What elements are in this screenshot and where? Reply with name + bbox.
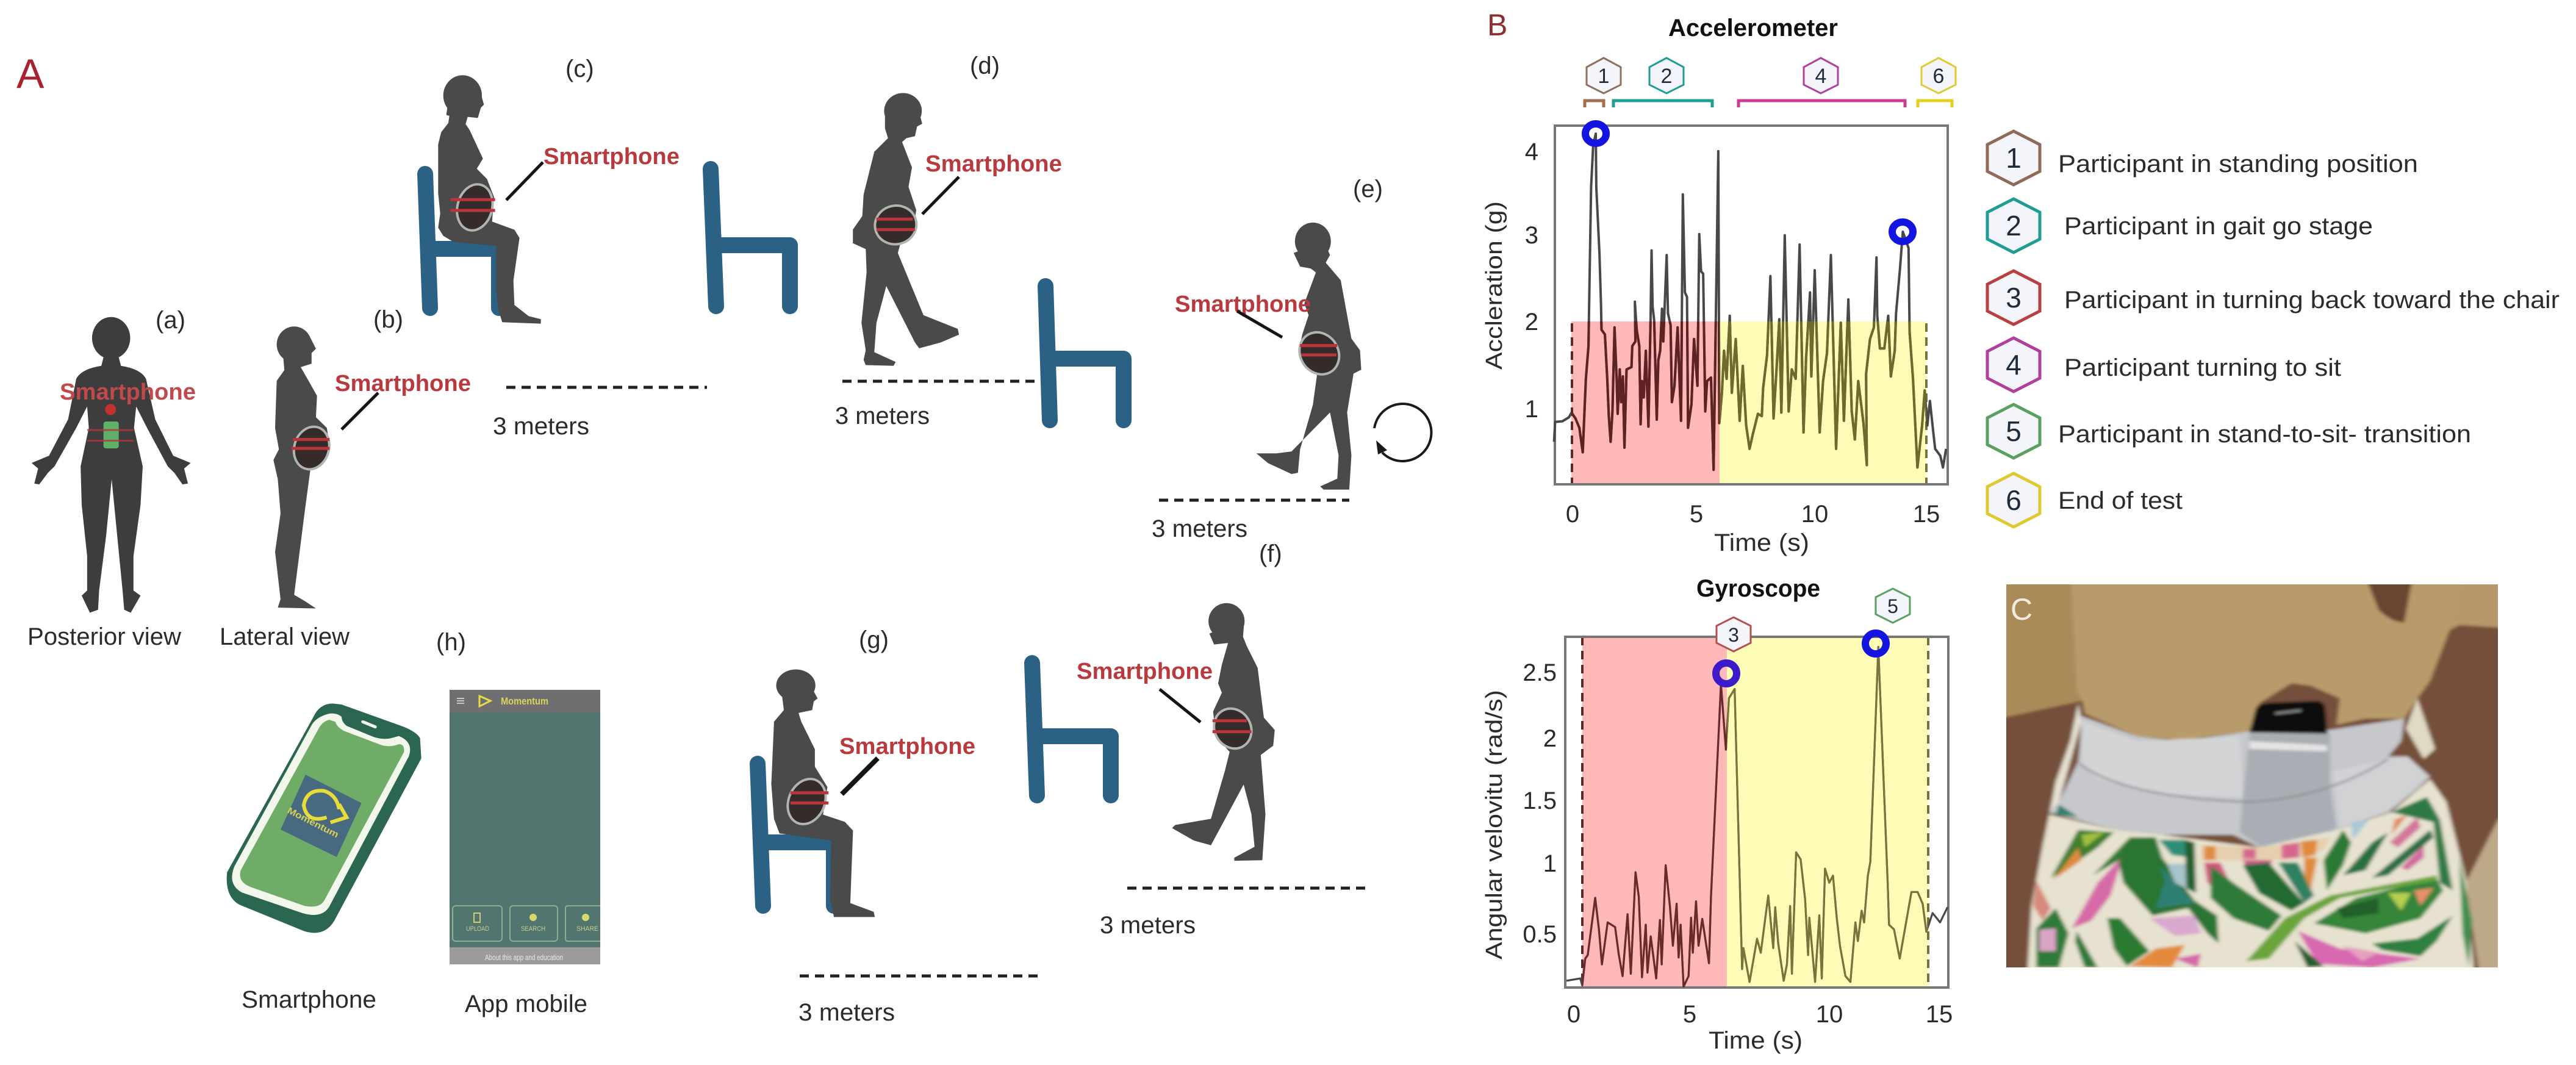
- y axis title: Angular velovitu (rad/s): [1482, 690, 1507, 959]
- leader line (g): [842, 758, 878, 794]
- legend item 6: [1987, 473, 2183, 527]
- stage marker 1: [1585, 58, 1621, 107]
- icon: rotation arrow: [1374, 404, 1431, 461]
- peak markers: [1585, 124, 1913, 242]
- label (a): (a): [156, 307, 185, 334]
- legend item 1: 1: [2006, 142, 2022, 174]
- app mobile screenshot: Momentum: [501, 695, 548, 707]
- stage marker 6: [1918, 58, 1956, 107]
- legend item 4: Participant turning to sit: [2064, 354, 2341, 381]
- legend item 2: 2: [2006, 210, 2022, 242]
- distance label (d): 3 meters: [835, 403, 930, 429]
- icon: smartphone with app logo: Momentum: [285, 805, 340, 840]
- label: Smartphone (d): Smartphone: [925, 151, 1062, 177]
- leader line (e): [1237, 311, 1282, 337]
- stage marker 2: [1613, 58, 1712, 107]
- chart: gyroscope: [1482, 589, 1953, 1054]
- distance line (c): [506, 385, 707, 389]
- app mobile screenshot: SHARE: [576, 925, 598, 933]
- legend item 1: Participant in standing position: [2058, 151, 2418, 178]
- chair (d): [1046, 286, 1124, 420]
- label (b): (b): [373, 306, 403, 333]
- figure (d) walking: [853, 93, 959, 366]
- label (h): (h): [436, 629, 466, 656]
- x axis ticks: 15: [1913, 501, 1940, 528]
- peak markers: [1716, 633, 1886, 684]
- stage marker 5: [1876, 589, 1910, 623]
- label: Smartphone (e): Smartphone: [1175, 292, 1311, 317]
- plot shading: [1571, 321, 1926, 484]
- stage marker 3: [1717, 617, 1751, 651]
- legend item 5: [1987, 404, 2471, 458]
- y axis ticks: [1525, 138, 1538, 423]
- distance label (e): 3 meters: [1152, 515, 1247, 542]
- label: Smartphone (c): Smartphone: [544, 144, 680, 170]
- legend item 6: 6: [2006, 484, 2022, 516]
- x axis ticks: 5: [1683, 1001, 1696, 1028]
- label: Smartphone (a): Smartphone: [60, 379, 196, 405]
- distance line (e): [1159, 499, 1349, 501]
- leader line (d): [922, 177, 959, 214]
- legend item 5: Participant in stand-to-sit- transition: [2058, 421, 2471, 448]
- label (g): (g): [859, 626, 889, 653]
- panel label C: C: [2011, 592, 2032, 626]
- angular velocity curve: [1566, 647, 1948, 986]
- app mobile screenshot: SEARCH: [521, 925, 545, 933]
- stage marker 3: 3: [1728, 624, 1739, 646]
- chair (g): [758, 764, 834, 906]
- distance label (f): 3 meters: [1100, 912, 1196, 939]
- figure (a) posterior view: [32, 317, 196, 613]
- app mobile screenshot: About this app and education: [485, 953, 563, 962]
- acceleration curve: [1554, 134, 1946, 470]
- y axis ticks: 2.5: [1523, 659, 1557, 686]
- figure (c) seated: [438, 75, 541, 324]
- stage marker 1: 1: [1598, 65, 1609, 88]
- legend item 1: [1987, 131, 2418, 185]
- x axis ticks: [1566, 501, 1940, 528]
- app mobile screenshot: UPLOAD: [466, 925, 489, 933]
- legend item 3: [1987, 271, 2560, 325]
- caption: posterior view: Posterior view: [27, 623, 181, 650]
- y axis ticks: 0.5: [1523, 921, 1557, 948]
- legend item 3: 3: [2006, 282, 2022, 314]
- x axis title: Time (s): [1709, 1027, 1803, 1054]
- leader line (c): [506, 162, 543, 200]
- y axis ticks: 1: [1543, 850, 1557, 877]
- caption: app mobile: App mobile: [465, 991, 587, 1017]
- plot frame: [1555, 126, 1948, 484]
- x axis ticks: 10: [1816, 1001, 1843, 1028]
- chair (c): [425, 174, 499, 308]
- figure (b) lateral view: [273, 326, 332, 609]
- distance line (f): [1127, 887, 1369, 889]
- y axis ticks: 4: [1525, 138, 1538, 165]
- app mobile screenshot: [450, 690, 600, 964]
- stage marker 5: 5: [1887, 595, 1898, 617]
- distance line (d): [842, 379, 1041, 383]
- distance label (g): 3 meters: [798, 999, 895, 1026]
- legend item 4: 4: [2006, 349, 2022, 381]
- y axis title: Accleration (g): [1482, 201, 1507, 370]
- x axis ticks: [1567, 1001, 1953, 1028]
- x axis ticks: 0: [1567, 1001, 1580, 1028]
- x axis ticks: 10: [1801, 501, 1828, 528]
- stage marker 4: [1738, 58, 1905, 107]
- legend item 5: 5: [2006, 415, 2022, 447]
- y axis ticks: 1.5: [1523, 787, 1557, 814]
- x axis title: Time (s): [1714, 529, 1809, 556]
- x axis ticks: 5: [1690, 501, 1703, 528]
- plot shading: [1582, 637, 1928, 988]
- label (e): (e): [1353, 176, 1383, 203]
- legend item 6: End of test: [2058, 487, 2183, 514]
- y axis ticks: 1: [1525, 396, 1538, 423]
- legend: [1987, 131, 2560, 527]
- label: Smartphone (b): Smartphone: [335, 371, 471, 396]
- x axis ticks: 0: [1566, 501, 1579, 528]
- chart title: gyroscope: Gyroscope: [1696, 575, 1820, 602]
- label (d): (d): [970, 52, 1000, 79]
- chair (f): [1032, 663, 1111, 795]
- stage marker 6: 6: [1933, 65, 1944, 88]
- y axis ticks: 2: [1543, 725, 1557, 752]
- x axis ticks: 15: [1926, 1001, 1953, 1028]
- chart title: accelerometer: Accelerometer: [1668, 15, 1838, 41]
- caption: lateral view: Lateral view: [220, 623, 350, 650]
- label (c): (c): [565, 56, 594, 82]
- panel label B: B: [1487, 8, 1507, 42]
- y axis ticks: [1523, 659, 1557, 948]
- panel C: photo of smartphone on waist belt: [2006, 584, 2498, 967]
- y axis ticks: 3: [1525, 222, 1538, 249]
- figure (f) walking to chair: [1172, 603, 1275, 861]
- figure (e) turning: [1257, 223, 1362, 490]
- panel label A: A: [16, 51, 45, 97]
- label: Smartphone (g): Smartphone: [839, 734, 975, 759]
- chart: accelerometer: [1482, 58, 1956, 556]
- y axis ticks: 2: [1525, 309, 1538, 335]
- label (f): (f): [1259, 540, 1282, 567]
- icon: smartphone with app logo: [227, 703, 422, 933]
- caption: smartphone: Smartphone: [242, 986, 376, 1013]
- distance label (c): 3 meters: [493, 413, 589, 440]
- leader line (b): [342, 393, 378, 429]
- legend item 3: Participant in turning back toward the chair: [2064, 287, 2560, 314]
- stage marker 4: 4: [1815, 65, 1826, 88]
- label: Smartphone (f): Smartphone: [1077, 659, 1213, 684]
- legend item 2: [1987, 199, 2373, 253]
- legend item 4: [1987, 338, 2341, 392]
- plot frame: [1565, 637, 1948, 988]
- stage marker 2: 2: [1661, 65, 1672, 88]
- chair: return: [711, 169, 790, 306]
- legend item 2: Participant in gait go stage: [2064, 213, 2373, 240]
- figure (g) seated: [771, 670, 875, 917]
- leader line (f): [1160, 689, 1200, 722]
- distance line (g): [800, 975, 1041, 977]
